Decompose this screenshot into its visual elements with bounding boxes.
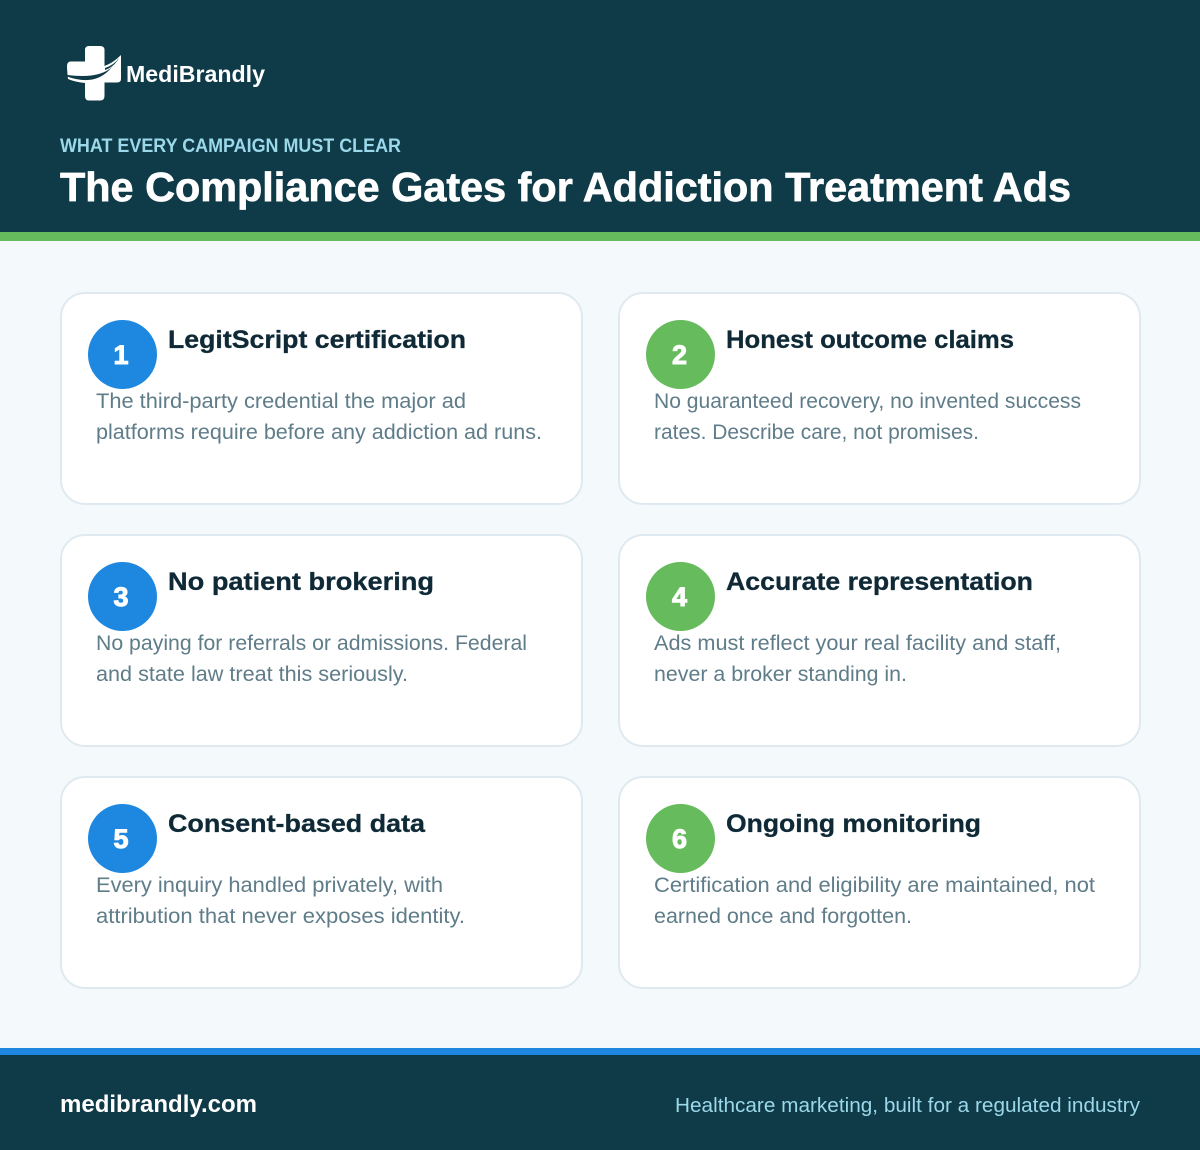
title: The Compliance Gates for Addiction Treatment Ads <box>60 164 1071 210</box>
card heading: Consent-based data <box>168 810 426 838</box>
badge: number 4: 4 <box>672 582 687 612</box>
logo: MediBrandly <box>67 46 265 100</box>
panel: gate 6 Ongoing monitoring <box>619 777 1140 988</box>
panel: gate 1 LegitScript certification <box>61 293 582 504</box>
badge: number 4 <box>646 562 715 631</box>
card body: The third-party credential the major ad <box>96 389 466 413</box>
panel: gate 2 Honest outcome claims <box>619 293 1140 504</box>
card heading: Accurate representation <box>726 568 1033 596</box>
card body <box>96 389 542 444</box>
card body <box>96 873 465 928</box>
card body <box>654 631 1061 686</box>
card body <box>654 873 1095 928</box>
icon: medical cross with swoosh <box>67 46 121 100</box>
card body: never a broker standing in. <box>654 662 907 686</box>
card heading: LegitScript certification <box>168 326 466 354</box>
card heading: No patient brokering <box>168 568 434 596</box>
badge: number 2 <box>646 320 715 389</box>
card body: Every inquiry handled privately, with <box>96 873 443 897</box>
card body: No paying for referrals or admissions. Federal <box>96 631 527 655</box>
badge: number 5 <box>88 804 157 873</box>
card body: Certification and eligibility are maintained, not <box>654 873 1095 897</box>
card body: attribution that never exposes identity. <box>96 904 465 928</box>
badge: number 3 <box>88 562 157 631</box>
card body <box>96 631 527 686</box>
footer website: medibrandly.com <box>60 1091 257 1118</box>
panel: gate 4 Accurate representation <box>619 535 1140 746</box>
badge: number 3: 3 <box>113 582 129 612</box>
badge: number 2: 2 <box>672 340 687 370</box>
panel: gate 5 Consent-based data <box>61 777 582 988</box>
card body: rates. Describe care, not promises. <box>654 420 979 444</box>
card heading: Ongoing monitoring <box>726 810 981 838</box>
badge: number 6 <box>646 804 715 873</box>
card body: platforms require before any addiction ad runs. <box>96 420 542 444</box>
card body: Ads must reflect your real facility and staff, <box>654 631 1061 655</box>
card body: earned once and forgotten. <box>654 904 912 928</box>
header band <box>0 0 1200 241</box>
badge: number 6: 6 <box>672 824 687 854</box>
card body: and state law treat this seriously. <box>96 662 408 686</box>
footer tagline: Healthcare marketing, built for a regulated industry <box>675 1095 1140 1117</box>
footer band <box>0 1048 1200 1150</box>
panel: gate 3 No patient brokering <box>61 535 582 746</box>
card body: No guaranteed recovery, no invented success <box>654 389 1081 413</box>
badge: number 1 <box>88 320 157 389</box>
eyebrow heading: WHAT EVERY CAMPAIGN MUST CLEAR <box>60 136 401 157</box>
card heading: Honest outcome claims <box>726 326 1014 354</box>
badge: number 1: 1 <box>113 340 129 370</box>
logo wordmark: MediBrandly <box>126 61 265 87</box>
card body <box>654 389 1081 444</box>
badge: number 5: 5 <box>113 824 129 854</box>
